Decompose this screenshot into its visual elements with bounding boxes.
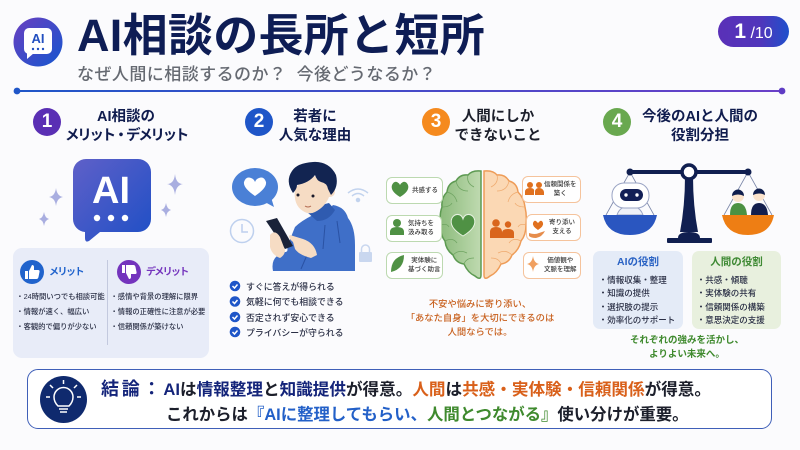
box: values [523, 252, 581, 279]
check list: 気軽に何でも相談できる [246, 297, 343, 307]
heading: section 4: 今後のAIと人間の [642, 109, 758, 125]
heading: section 1: AI相談の [97, 109, 155, 125]
check list: すぐに答えが得られる [246, 282, 335, 292]
heading: section 3: 人間にしか [462, 109, 534, 125]
closing note [630, 334, 744, 360]
AI role list [599, 274, 675, 325]
box: trust: 築く [554, 190, 567, 197]
wifi [348, 189, 368, 202]
illustration: brain [440, 170, 527, 279]
AI role list: ・情報収集・整理 [599, 274, 667, 284]
merit list [16, 292, 105, 330]
box: trust [522, 176, 581, 203]
beam and stand [626, 168, 752, 243]
page badge: 1 /10 [734, 20, 773, 43]
box: feelings [386, 215, 442, 242]
conclusion panel [27, 369, 772, 429]
panel: AI role [593, 251, 683, 329]
number 3: 3 [431, 111, 441, 132]
illustration: scale [603, 163, 774, 243]
human role list [697, 274, 765, 325]
number 1 [33, 108, 61, 136]
people [730, 188, 768, 215]
subtitle: なぜ人間に相談するのか？ 今後どうなるか？ [77, 65, 436, 84]
check list: プライバシーが守られる [246, 328, 343, 338]
human role list: ・信頼関係の構築 [697, 302, 765, 312]
box: support: 寄り添い [549, 219, 575, 226]
header logo icon [14, 18, 62, 66]
box: experience [386, 252, 443, 279]
box: feelings: 汲み取る [408, 229, 434, 236]
AI role heading: AIの役割 [617, 256, 659, 268]
panel: merits and demerits [13, 248, 209, 358]
robot [612, 183, 649, 215]
number 4 [603, 108, 631, 136]
human role list: ・実体験の共有 [697, 288, 756, 298]
hoodie [272, 205, 355, 271]
page badge [718, 16, 789, 47]
number 2 [245, 108, 273, 136]
merit list: ・客観的で偏りが少ない [16, 322, 97, 330]
heading: section 2: 人気な理由 [279, 128, 351, 144]
clock [230, 220, 254, 242]
divider [107, 260, 108, 345]
heading: section 3: できないこと [454, 128, 542, 144]
box: values: 価値観や [547, 257, 573, 264]
human strength note: 「あなた自身」を大切にできるのは [406, 313, 554, 323]
heading: section 1: メリット・デメリット [65, 128, 187, 144]
header logo icon: AI [32, 31, 44, 46]
icon: light bulb [40, 376, 87, 423]
heart [451, 214, 475, 236]
demerit heading: デメリット [146, 267, 188, 278]
merit list: ・24時間いつでも相談可能 [16, 292, 105, 300]
merit list: ・情報が速く、幅広い [16, 306, 89, 316]
heading: section 2: 若者に [293, 109, 337, 125]
heading: section 4: 役割分担 [671, 128, 729, 144]
brain folds [441, 175, 474, 264]
number 2: 2 [254, 111, 264, 132]
number 1: 1 [42, 111, 52, 132]
conclusion line 2: これからは『AIに整理してもらい、人間とつながる』使い分けが重要。 [166, 406, 689, 424]
heart bubble [232, 168, 278, 207]
AI role list: ・選択肢の提示 [599, 302, 658, 312]
human strength note: 不安や悩みに寄り添い、 [429, 299, 531, 309]
box: empathy [386, 177, 443, 204]
lock [359, 245, 372, 262]
human strength note: 人間ならでは。 [448, 327, 512, 337]
closing note: よりよい未来へ。 [649, 349, 725, 360]
merit heading: メリット [49, 267, 83, 278]
demerit list: ・情報の正確性に注意が必要 [110, 306, 205, 316]
human role list: ・共感・傾聴 [697, 274, 748, 284]
title: AI相談の長所と短所 [77, 10, 485, 61]
heading: section 3 [454, 108, 542, 144]
check list: 否定されず安心できる [246, 313, 335, 323]
box: feelings: 気持ちを [408, 220, 434, 227]
AI role list: ・効率化のサポート [599, 315, 675, 325]
hands [270, 232, 285, 258]
face [295, 176, 335, 213]
check list [246, 282, 343, 338]
number 4: 4 [612, 111, 622, 132]
icon: AI speech bubble [39, 159, 183, 242]
demerit list [110, 292, 205, 330]
header rule [14, 88, 786, 94]
conclusion line 1: 結論：AIは情報整理と知識提供が得意。人間は共感・実体験・信頼関係が得意。 [101, 379, 711, 399]
phone [266, 218, 293, 249]
number 3 [422, 108, 450, 136]
pans [603, 215, 657, 235]
AI role list: ・知識の提供 [599, 288, 650, 298]
box: experience: 基づく助言 [408, 266, 440, 273]
icon: thumbs down [117, 260, 141, 284]
box: values: 文脈を理解 [544, 266, 576, 273]
closing note: それぞれの強みを活かし、 [630, 335, 744, 346]
icon: thumbs up [20, 260, 44, 284]
icon: AI speech bubble: AI [92, 170, 130, 212]
people [490, 219, 514, 238]
icons: check marks [230, 280, 240, 338]
box: support: 支える [552, 228, 572, 235]
illustration: young person with phone [230, 162, 372, 271]
human strength note [406, 299, 554, 337]
box: experience: 実体験に [411, 257, 437, 264]
heading: section 4 [642, 108, 758, 144]
icons: brain box icons [390, 182, 545, 272]
demerit list: ・感情や背景の理解に限界 [110, 292, 198, 300]
box: support [526, 214, 581, 241]
box: trust: 信頼関係を [544, 181, 576, 188]
panel: human role [692, 251, 781, 329]
demerit list: ・信頼関係が築けない [110, 322, 183, 330]
heading: section 2 [279, 108, 351, 144]
heading: section 1 [65, 108, 188, 144]
human role list: ・意思決定の支援 [697, 315, 765, 325]
human role heading: 人間の役割 [710, 256, 763, 268]
box: empathy: 共感する [412, 187, 438, 194]
